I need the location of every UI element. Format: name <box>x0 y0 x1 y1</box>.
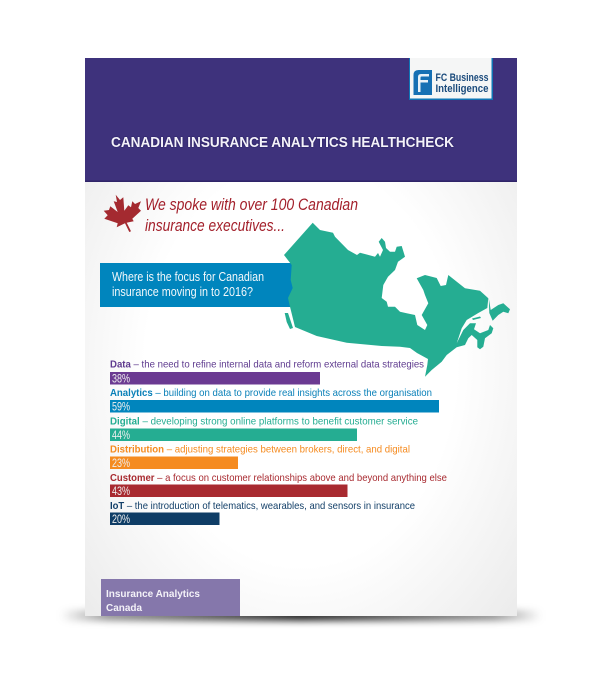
result: IoT 20%: 20% <box>112 514 130 526</box>
result: Digital 44%: 44% <box>112 430 130 442</box>
footer text: Canada <box>106 602 142 614</box>
header banner <box>85 58 517 182</box>
result: Analytics 59%: Analytics – building on data to provide real insights across the organisation <box>110 387 432 399</box>
result: Data 38% <box>110 358 424 386</box>
result: Customer 43%: Customer – a focus on customer relationships above and beyond anything else <box>110 472 447 484</box>
result: Analytics 59%: 59% <box>112 402 130 414</box>
result: Distribution 23% <box>110 444 410 470</box>
intro text: insurance executives... <box>145 217 285 235</box>
result: IoT 20%: IoT – the introduction of telematics, wearables, and sensors in insurance <box>110 500 415 512</box>
result: Digital 44% <box>110 416 418 442</box>
result: Customer 43% <box>110 472 447 498</box>
result: Distribution 23%: Distribution – adjusting strategies between brokers, direct, and digital <box>110 444 410 456</box>
intro text: We spoke with over 100 Canadian <box>145 196 358 214</box>
result: Digital 44%: Digital – developing strong online platforms to benefit customer service <box>110 416 418 428</box>
footer text <box>106 588 200 614</box>
logo: FC Business Intelligence <box>409 58 493 100</box>
question text: insurance moving in to 2016? <box>112 285 253 299</box>
question text <box>112 270 264 299</box>
result: Data 38%: Data – the need to refine internal data and reform external data strategies <box>110 358 424 370</box>
footer text: Insurance Analytics <box>106 588 200 600</box>
question panel <box>100 263 295 307</box>
logo wordmark: FC Business <box>436 72 488 84</box>
survey results <box>110 358 447 526</box>
report sheet <box>85 58 517 616</box>
page shadow <box>60 610 542 621</box>
logo wordmark <box>436 72 488 95</box>
result: Distribution 23%: 23% <box>112 458 130 470</box>
logo wordmark: Intelligence <box>436 83 488 95</box>
result: Analytics 59% <box>110 387 439 414</box>
result: IoT 20% <box>110 500 415 526</box>
footer tag <box>101 579 240 616</box>
title: CANADIAN INSURANCE ANALYTICS HEALTHCHECK <box>111 135 454 151</box>
Newfoundland <box>489 298 510 321</box>
icon: maple leaf <box>104 195 141 232</box>
map of Canada <box>284 223 510 377</box>
icon: F mark <box>414 70 432 95</box>
question text: Where is the focus for Canadian <box>112 270 264 284</box>
title: CANADIAN INSURANCE ANALYTICS HEALTHCHECK <box>111 135 454 151</box>
Vancouver Island <box>285 313 293 329</box>
intro text <box>145 196 358 235</box>
result: Data 38%: 38% <box>112 374 130 386</box>
result: Customer 43%: 43% <box>112 486 130 498</box>
Anticosti Island <box>472 316 481 320</box>
